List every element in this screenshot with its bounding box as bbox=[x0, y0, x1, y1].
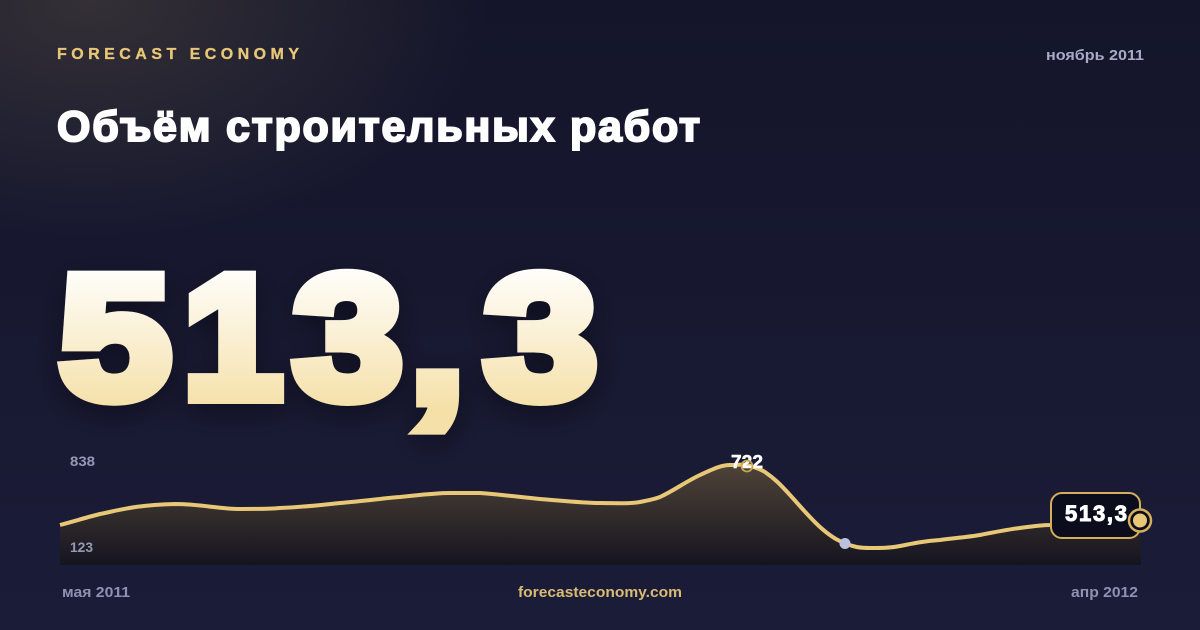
big value: 3 bbox=[293, 240, 402, 435]
brand label: FORECAST ECONOMY bbox=[57, 46, 299, 63]
sparkline chart bbox=[60, 452, 1151, 565]
big value: , bbox=[410, 242, 465, 438]
current marker bbox=[1129, 510, 1151, 532]
date label: ноябрь 2011 bbox=[1046, 47, 1144, 64]
big value: 3 bbox=[484, 240, 597, 435]
peak marker bbox=[742, 460, 752, 472]
source link: forecasteconomy.com bbox=[518, 585, 682, 601]
title: Объём строительных работ bbox=[57, 103, 700, 151]
big value: 5 bbox=[59, 239, 171, 435]
axis max label: 838 bbox=[70, 454, 96, 469]
chart line bbox=[60, 465, 1140, 548]
peak label: 722 bbox=[731, 452, 763, 472]
chart area fill bbox=[60, 465, 1141, 565]
big value: 1 bbox=[183, 240, 282, 435]
current value callout bbox=[1051, 493, 1140, 538]
end date label: апр 2012 bbox=[1071, 585, 1138, 601]
start date label: мая 2011 bbox=[62, 585, 130, 601]
big value bbox=[59, 239, 597, 438]
axis min label: 123 bbox=[70, 540, 93, 555]
low marker bbox=[840, 538, 850, 549]
current value callout: 513,3 bbox=[1065, 501, 1127, 526]
